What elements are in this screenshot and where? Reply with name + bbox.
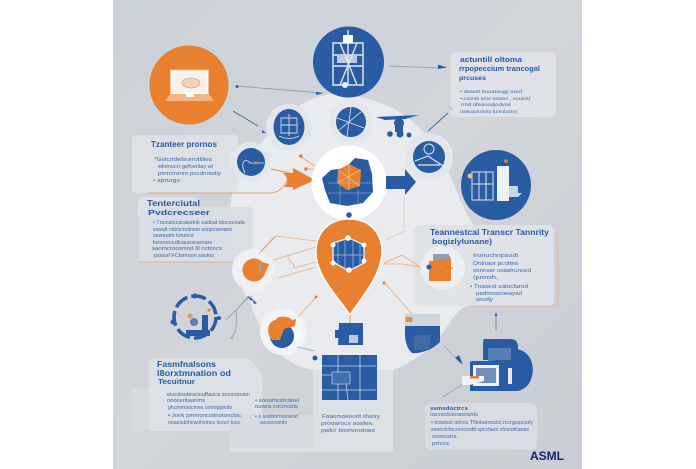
- icon: middle circle globe: [329, 100, 373, 144]
- icon: orange and blue orb: [260, 296, 318, 355]
- arrow: blue right arrow: [386, 169, 416, 195]
- heading: Tenterciutal: [147, 199, 200, 208]
- background panel: [113, 0, 582, 469]
- heading: [157, 360, 231, 386]
- text block: ssoocstrs.: [432, 434, 458, 440]
- heading: Teannestcal Transcr Tannrity: [430, 228, 550, 237]
- text block: sxwalt ndzocnotnom soopcsenaos: [153, 227, 233, 233]
- text block: mid bullets: ouwra cocmcots: [255, 404, 299, 410]
- text block: mid bullets: [255, 398, 299, 426]
- text block: oscnorlosoasoonts: [430, 412, 479, 418]
- text block: Onlnaor pcoltes: [473, 261, 518, 267]
- text block: • sprurgs: [153, 178, 181, 184]
- icon: orange folder: [421, 246, 465, 290]
- text block: prrocc: [432, 441, 451, 447]
- text block: • Tnasest satocfarod: [470, 284, 528, 290]
- text block: ooaocdohcwohcmcs lcroct tocs: [168, 420, 241, 426]
- panel: top right callout: [450, 52, 556, 117]
- panel: formulations: [132, 358, 314, 448]
- panel: technical transfer: [413, 225, 558, 306]
- text block: mid bullets: socoocomts: [260, 420, 287, 426]
- heading: Tzanteer prornos: [151, 139, 217, 149]
- text block: seweutm tonerce: [153, 233, 194, 239]
- text block: [470, 253, 531, 303]
- icon: central white circle with hexagon: [312, 146, 386, 220]
- icon: laptop: [165, 70, 214, 101]
- text block: *Gstcrldwlsurrotlilies: [154, 157, 213, 163]
- connector lines: [227, 296, 257, 338]
- heading: Fasmfnalsons: [157, 360, 217, 369]
- text block: ghcmmoocmes ooooppinds: [168, 405, 233, 411]
- bottom faint panel: [230, 370, 393, 452]
- icon: ring of people: [170, 294, 221, 338]
- text block: mid bullets: • s soidmmoctend: [255, 414, 298, 420]
- decorative connector right: [386, 197, 404, 240]
- text block: mid bullets: • sooumcidcdoel: [255, 398, 299, 404]
- arrow: laptop to top circle: [236, 85, 324, 95]
- panel: orange laptop circle: [150, 46, 228, 124]
- panel: transfer process: [132, 135, 238, 193]
- icon: orange pin: [316, 219, 382, 315]
- icon: orange orb: [232, 237, 275, 291]
- icon: large right machine circle: [461, 150, 531, 220]
- heading: Pvdcrecseer: [148, 208, 210, 217]
- arrow: top circle to callout: [389, 64, 447, 69]
- heading: [147, 199, 210, 217]
- text block: saomcrocemnd Ill nctcecs: [152, 246, 223, 252]
- panel: thin connectors left of pin: [259, 236, 316, 278]
- logo: ASML: ASML: [530, 449, 564, 463]
- icon: small left circle: [230, 142, 270, 182]
- text block: [153, 157, 222, 184]
- text block: seudly: [476, 297, 494, 303]
- icon: blueprint panel: [322, 355, 377, 400]
- heading: Tecuitnur: [158, 377, 195, 386]
- text block: • Jonk pmmoncoitnotoocloc: [168, 413, 242, 419]
- arrow: callout to right circle: [428, 105, 453, 131]
- text block: bottom center: pwlcr txomorotoes: [321, 428, 375, 434]
- text block: sonnser coastrunced: [473, 268, 531, 274]
- text block: hoooeccdlcaunsraeraio: [153, 240, 212, 246]
- text block: ssmsdoctrcs: [430, 406, 468, 412]
- icon: equipment: [462, 339, 533, 391]
- central white blob: [231, 94, 475, 370]
- arrow: to equipment: [443, 312, 497, 397]
- arrow: to small circle: [233, 111, 266, 133]
- panel: technical provider: [138, 197, 253, 262]
- panel: equipment text: [425, 403, 537, 450]
- text block: rmd ofeaoodjodvos: [461, 102, 512, 107]
- heading: l8orxtmnation od: [157, 369, 231, 378]
- text block: wlnmocn-gefoenlay wl: [158, 164, 213, 170]
- text block: [167, 392, 250, 426]
- text block: pmrcrrenm pxcdnosdiy: [158, 171, 222, 177]
- text block: [460, 89, 530, 114]
- heading: [430, 228, 550, 246]
- text block: pssosf FCtsmoon sastos: [154, 253, 215, 259]
- small blue arrow: [297, 347, 318, 360]
- text block: • dswotl bnoatoogy ared: [460, 89, 523, 94]
- text block: pedmosooeayad: [476, 291, 522, 297]
- text block: bottom center: prooarocs sosfes.: [321, 421, 375, 427]
- heading: rrpopeccium trancogal: [459, 64, 540, 73]
- orange line to block: [382, 282, 412, 314]
- text block: bottom center: Foaomoeoont sfuory: [322, 414, 380, 420]
- text block: bottom center: [321, 414, 380, 434]
- icon: small left top circle: [266, 104, 312, 150]
- text block: [152, 220, 245, 259]
- text block: soooctcfocoorcoottt spccfaoo chsoofcaoas: [431, 427, 530, 433]
- text block: (prmsh,: [473, 275, 498, 281]
- text block: • Tnonstcoscasetnk sadsat stocovoate: [153, 220, 245, 226]
- text block: oooceritaanms: [167, 398, 206, 404]
- text block: eiucdooteuctcuffauca scoxoxoxm: [167, 392, 250, 398]
- icon: drone: [376, 115, 419, 138]
- heading: prcuses: [459, 76, 487, 82]
- icon: central machine: [335, 315, 363, 345]
- heading: actuntill oltoma: [460, 57, 522, 64]
- heading: bogizlylunane): [432, 237, 493, 246]
- heading: [459, 57, 540, 82]
- text block: [430, 406, 534, 447]
- text block: Ironuchnpsodi: [473, 253, 518, 259]
- arrow: orange connector: [148, 154, 316, 193]
- text block: • trctstsst orlcoc TNotoenoctcl.rccrgosocoly: [431, 420, 534, 426]
- icon: top blue circle scaffold: [313, 26, 384, 98]
- icon: blue block with orange tag: [405, 314, 440, 353]
- connectors near folder: [384, 255, 420, 267]
- icon: right small circle: [405, 133, 453, 181]
- text block: • coontk ame ssamn , ooumsl: [460, 96, 530, 101]
- text block: owsuackrnoto fumoboxe): [460, 109, 518, 114]
